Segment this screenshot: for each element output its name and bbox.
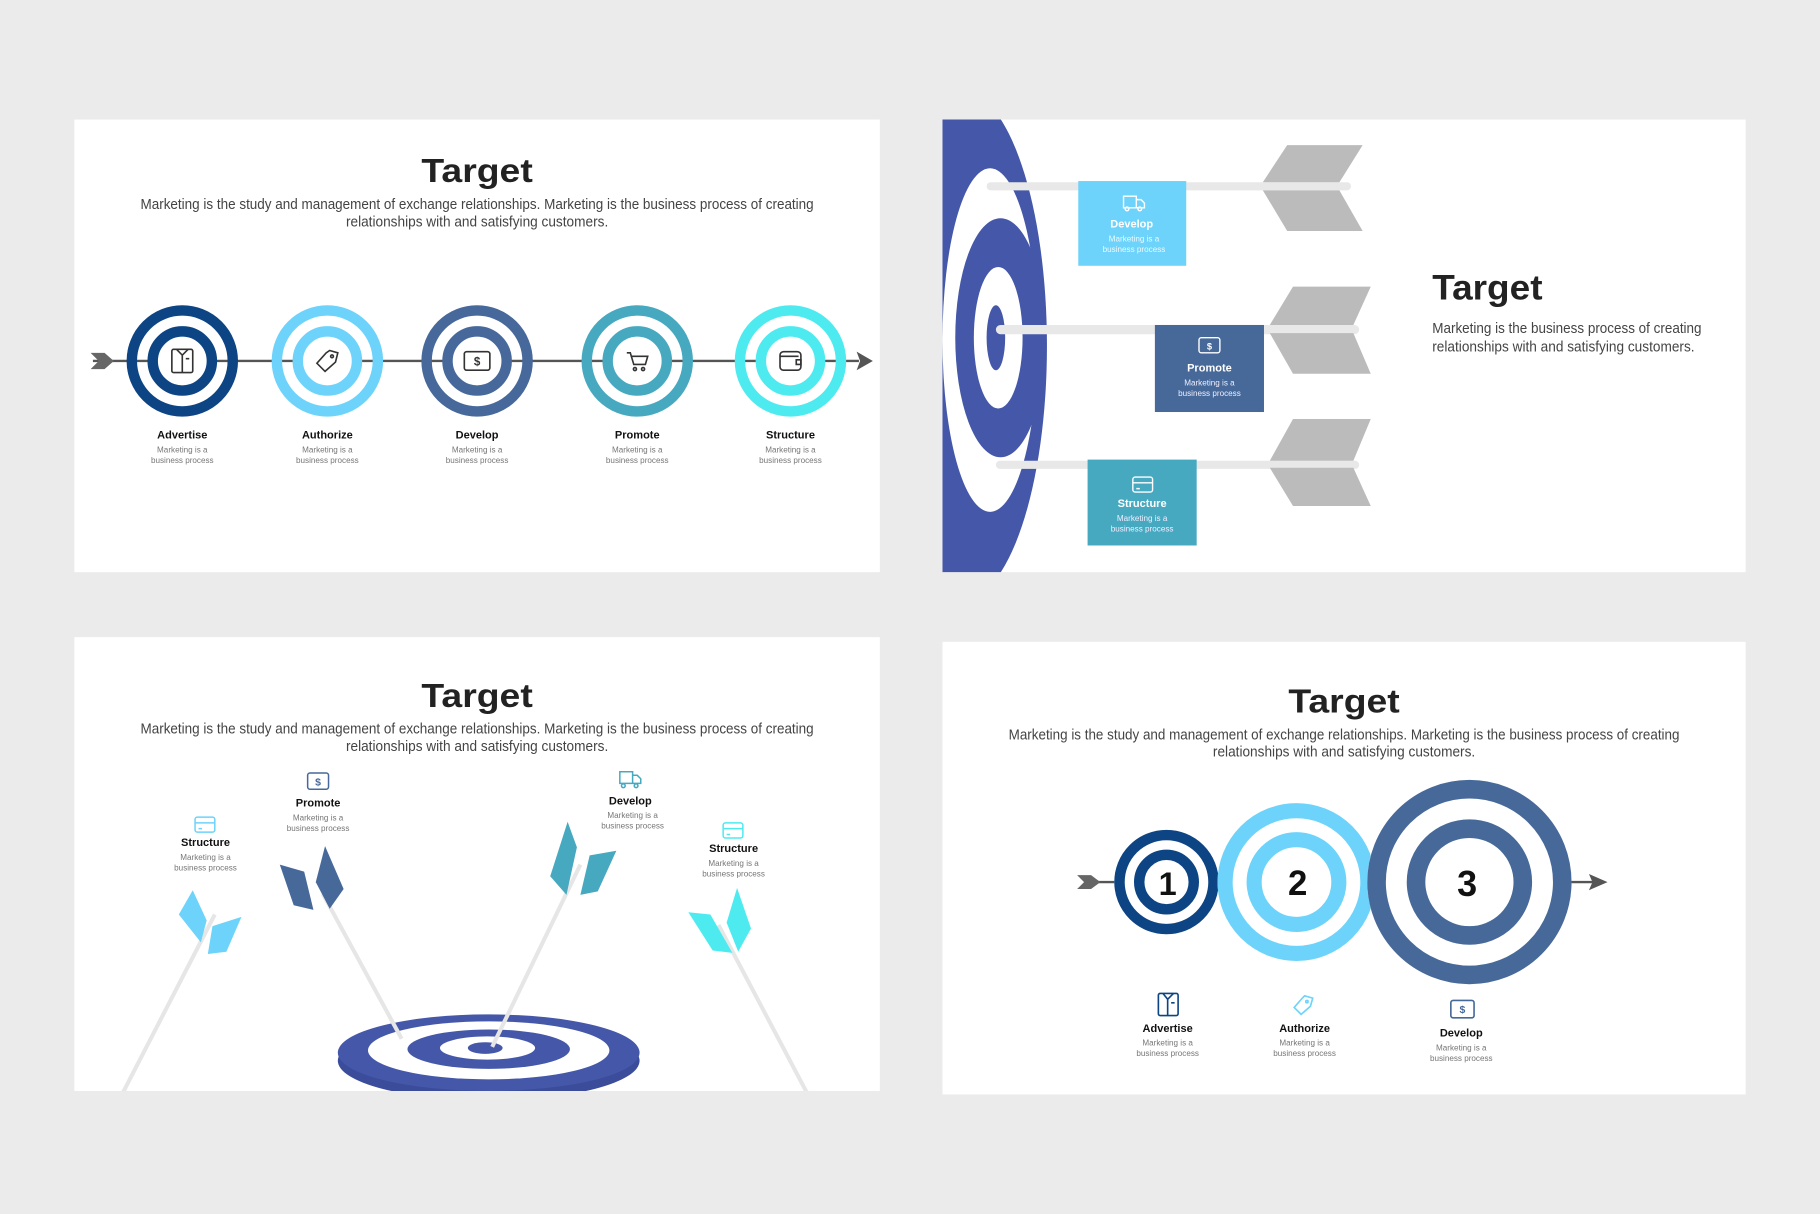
target: Promote: business process [606, 456, 669, 465]
target: Advertise [132, 310, 233, 465]
label: Authorize: Marketing is a [1279, 1039, 1330, 1048]
icon: truck [1124, 196, 1144, 211]
label: Authorize: business process [1273, 1049, 1336, 1058]
label: Develop: $ [1460, 1005, 1466, 1016]
target 2 [1218, 803, 1375, 961]
title: Target [1288, 684, 1400, 721]
arrow 3 [996, 419, 1371, 506]
title: Target [1432, 268, 1543, 307]
panel: arrows hitting target [74, 637, 880, 1100]
description: relationships with and satisfying customers. [1432, 340, 1695, 356]
label: Develop [1430, 1000, 1493, 1063]
target: Authorize: Marketing is a [302, 446, 353, 455]
box: Promote: Marketing is a [1184, 378, 1235, 387]
target: Structure: business process [759, 456, 822, 465]
label: Authorize: Authorize [1279, 1023, 1330, 1035]
description [1009, 727, 1679, 761]
arrow line [91, 352, 873, 370]
icon: shirt [172, 349, 193, 373]
label: Develop: Marketing is a [607, 811, 658, 820]
label: Authorize [1273, 996, 1336, 1058]
label: Structure right: business process [702, 869, 765, 878]
arrow: Structure right [688, 888, 809, 1097]
description: Marketing is the study and management of exchange relationships. Marketing is the business process of creating [1009, 727, 1679, 743]
target 1: 1 [1159, 866, 1177, 902]
description [1432, 321, 1702, 356]
label: Develop: business process [601, 822, 664, 831]
description: relationships with and satisfying customers. [1213, 745, 1475, 761]
target: Promote [587, 310, 688, 465]
box: Develop: business process [1103, 245, 1165, 254]
label: Develop: business process [1430, 1054, 1493, 1063]
icon: money [464, 352, 490, 370]
target 3: 3 [1457, 863, 1477, 904]
box: Promote: Promote [1187, 362, 1232, 374]
arrow: Develop [492, 822, 616, 1047]
target: Structure: Marketing is a [765, 446, 816, 455]
target: Authorize: business process [296, 456, 359, 465]
label: Structure right: Marketing is a [708, 859, 759, 868]
target: Develop: business process [446, 456, 508, 465]
target: Advertise: Advertise [157, 430, 207, 442]
description [141, 197, 814, 230]
target: Advertise: Marketing is a [157, 446, 208, 455]
target: Develop: Marketing is a [452, 446, 503, 455]
panel: numbered growing targets [942, 642, 1746, 1094]
label: Structure left: Structure [181, 837, 230, 849]
box: Develop [1078, 181, 1186, 266]
description [141, 722, 814, 755]
target 2: 2 [1288, 864, 1307, 903]
label: Structure left: Marketing is a [180, 853, 231, 862]
description: Marketing is the study and management of exchange relationships. Marketing is the business process of creating [141, 722, 814, 738]
target side view [942, 120, 1047, 572]
label: Promote: $ [315, 778, 321, 789]
arrow: Structure left [121, 890, 241, 1097]
label: Promote: Promote [296, 798, 340, 810]
label: Advertise: business process [1136, 1049, 1199, 1058]
box: Structure: Structure [1118, 498, 1167, 510]
label: Structure left [174, 817, 237, 872]
label: Develop: Marketing is a [1436, 1043, 1487, 1052]
target: Promote: Promote [615, 430, 660, 442]
target: Advertise: business process [151, 456, 214, 465]
box: Promote [1155, 325, 1264, 412]
target 1 [1114, 830, 1219, 934]
box: Promote: business process [1178, 389, 1241, 398]
arrow 2 [996, 287, 1371, 374]
panel: side target with arrows [942, 120, 1746, 572]
label: Structure left: business process [174, 863, 237, 872]
icon: cart [627, 353, 648, 371]
icon: tag [317, 351, 338, 371]
target: Promote: Marketing is a [612, 446, 663, 455]
description: relationships with and satisfying customers. [346, 739, 608, 755]
description: relationships with and satisfying customers. [346, 214, 608, 230]
label: Develop: Develop [609, 795, 652, 807]
label: Advertise: Marketing is a [1142, 1039, 1193, 1048]
icon: card [1133, 477, 1153, 492]
label: Structure right: Structure [709, 843, 758, 855]
box: Develop: Marketing is a [1109, 234, 1160, 243]
box: Develop: Develop [1110, 218, 1153, 230]
target: Authorize: Authorize [302, 430, 353, 442]
title: Target [421, 153, 533, 190]
box: Structure: business process [1111, 525, 1173, 534]
label: Promote: Marketing is a [293, 814, 344, 823]
title: Target [421, 678, 533, 715]
label: Promote [287, 773, 349, 833]
panel: timeline of five targets [74, 120, 880, 572]
target 3 [1367, 780, 1572, 984]
target: Authorize [277, 310, 378, 465]
label: Develop [601, 772, 664, 831]
description: Marketing is the business process of creating [1432, 321, 1702, 337]
label: Develop: Develop [1440, 1027, 1483, 1039]
label: Advertise [1136, 993, 1199, 1058]
arrow: Promote [280, 846, 402, 1039]
box: Structure [1088, 460, 1197, 545]
target: Structure: Structure [766, 430, 815, 442]
arrow 1 [987, 145, 1363, 231]
target: Develop: Develop [456, 430, 499, 442]
icon: wallet [780, 352, 801, 370]
target: Develop [427, 310, 528, 465]
label: Promote: business process [287, 824, 349, 833]
label: Advertise: Advertise [1143, 1023, 1193, 1035]
box: Structure: Marketing is a [1117, 514, 1168, 523]
label: Structure right [702, 823, 765, 878]
icon: money: $ [474, 356, 481, 369]
arrow line [1077, 874, 1608, 890]
description: Marketing is the study and management of exchange relationships. Marketing is the business process of creating [141, 197, 814, 213]
target: Structure [740, 310, 841, 465]
icon: money: $ [1207, 341, 1213, 351]
target on ground [338, 1014, 640, 1091]
